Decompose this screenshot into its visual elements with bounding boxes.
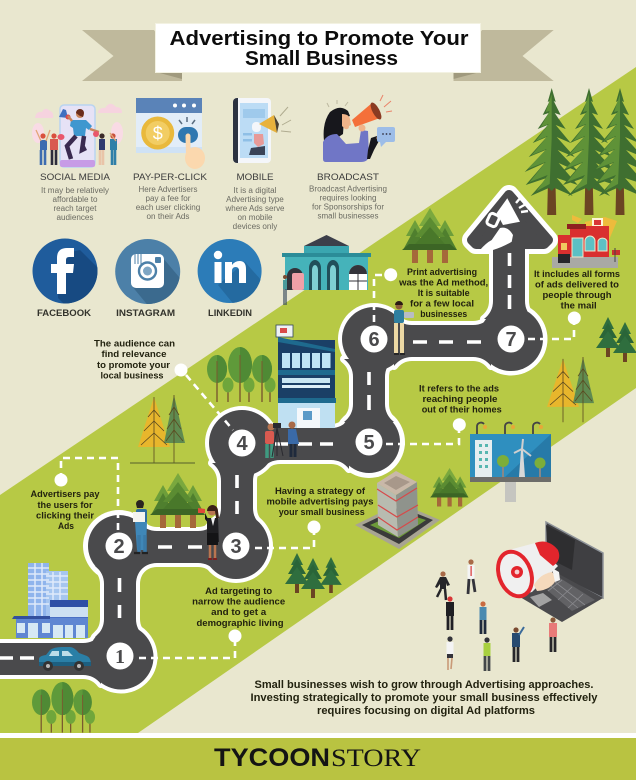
footer logo serif part: STORY <box>331 745 421 772</box>
label: linkedin: LINKEDIN <box>208 308 252 319</box>
icon: pay-per-click <box>136 98 205 169</box>
step number markers: 2 <box>113 536 125 558</box>
title ribbon <box>82 23 554 81</box>
person: woman with laptop <box>394 301 414 354</box>
blue tall shop building <box>276 325 336 428</box>
teal building <box>282 235 371 305</box>
section: mobile text: MOBILE <box>236 172 274 183</box>
step 6 text: was the Ad method, <box>398 277 488 288</box>
step number markers: 3 <box>230 536 242 558</box>
step 6 text: Print advertising <box>407 266 477 277</box>
step 7 text <box>534 268 620 311</box>
step 2 text: the users for <box>38 499 93 510</box>
section: mobile text: on mobile <box>238 213 273 222</box>
person: cameraman and presenter <box>265 422 299 458</box>
label: facebook: FACEBOOK <box>37 308 91 319</box>
section: mobile text: It is a digital <box>234 186 277 195</box>
isometric tower <box>355 471 440 549</box>
step 4 text: local business <box>100 370 164 381</box>
title text: Small Business <box>245 47 398 70</box>
section: social media text: audiences <box>56 213 94 222</box>
icon: linkedin <box>198 239 262 303</box>
step number markers: 4 <box>236 433 248 455</box>
section: pay-per-click text: Here Advertisers <box>138 185 198 194</box>
title text: Advertising to Promote Your <box>170 27 469 50</box>
section: social media text: SOCIAL MEDIA <box>40 172 111 183</box>
section: mobile text <box>225 172 285 231</box>
dashed connectors <box>61 275 574 658</box>
step 6 text: It is suitable <box>418 287 470 298</box>
section: social media text <box>40 172 111 222</box>
billboard <box>470 423 551 502</box>
icon: social media <box>32 104 123 167</box>
pine cluster near steps 2-3 <box>150 473 205 528</box>
step number markers: 5 <box>363 432 375 454</box>
section: broadcast text: Broadcast Advertising <box>309 184 387 194</box>
section: pay-per-click text: each user clicking <box>136 203 200 212</box>
step 5 text: out of their homes <box>422 404 502 415</box>
autumn trees right <box>547 357 594 422</box>
car <box>39 647 91 671</box>
section: broadcast text: BROADCAST <box>317 172 379 183</box>
section: mobile text: devices only <box>233 222 277 231</box>
step 5 text <box>419 383 502 415</box>
pine cluster near step 6 <box>402 208 457 263</box>
section: mobile text: Advertising type <box>226 195 284 204</box>
icon: facebook <box>32 238 98 304</box>
icon: pay-per-click: $ <box>153 124 163 144</box>
step 6 text: businesses <box>420 308 467 319</box>
step 7 text: of ads delivered to <box>535 279 619 290</box>
step number markers: 6 <box>368 329 380 351</box>
icon: broadcast <box>323 95 395 162</box>
road <box>0 195 548 694</box>
big pine trees <box>525 88 636 215</box>
small pines centre <box>285 553 342 598</box>
person: woman with megaphone <box>198 505 219 559</box>
round trees near step 4 <box>207 347 276 402</box>
step number markers: 7 <box>505 329 517 351</box>
section: social media text: reach target <box>54 204 97 213</box>
section: pay-per-click text <box>133 172 208 221</box>
step 5 text: It refers to the ads <box>419 383 499 394</box>
autumn trees left <box>130 395 195 463</box>
section: broadcast text: requires looking <box>320 194 376 202</box>
person: woman with tablet <box>133 500 148 553</box>
step number markers: 1 <box>115 646 125 668</box>
connector end dots <box>54 268 581 642</box>
section: social media text: It may be relatively <box>41 186 109 195</box>
section: pay-per-click text: on their Ads <box>146 212 190 221</box>
closing text block <box>250 679 598 717</box>
step 1 text: Ad targeting to <box>205 585 272 596</box>
step 1 text: narrow the audience <box>192 596 285 607</box>
step 4 text: find relevance <box>102 348 166 359</box>
closing text block: Investing strategically to promote your small business effectively <box>250 692 598 704</box>
blue office building <box>12 563 88 638</box>
step number markers <box>106 326 524 670</box>
section: broadcast text <box>309 172 387 220</box>
step 2 text: Advertisers pay <box>30 488 100 499</box>
step 3 text: your small business <box>279 506 365 517</box>
crowd of business people <box>435 559 557 671</box>
step 4 text: to promote your <box>97 359 170 370</box>
step 3 text <box>266 485 374 517</box>
closing text block: Small businesses wish to grow through Advertising approaches. <box>254 679 594 691</box>
footer bar <box>0 738 636 780</box>
step 6 text: for a few local <box>410 298 474 309</box>
step 3 text: Having a strategy of <box>275 485 366 496</box>
icon: instagram <box>115 239 180 304</box>
icon: mobile <box>233 98 291 163</box>
step 5 text: reaching people <box>422 393 498 404</box>
section: pay-per-click text: pay a fee for <box>146 194 191 203</box>
icon: megaphone on arrow <box>480 197 528 250</box>
step 7 text: It includes all forms <box>534 268 620 279</box>
step 4 text: The audience can <box>94 338 175 349</box>
section: broadcast text: small businesses <box>318 212 378 220</box>
white footer divider <box>0 733 636 738</box>
round trees bottom left <box>32 682 95 733</box>
section: broadcast text: for Sponsorships for <box>312 202 384 212</box>
road dashes <box>0 253 510 658</box>
closing text block: requires focusing on digital Ad platforms <box>317 705 535 717</box>
label: instagram: INSTAGRAM <box>116 308 175 319</box>
step 1 text <box>192 585 285 628</box>
section: social media text: affordable to <box>52 195 98 204</box>
red shop <box>552 215 620 268</box>
step 7 text: the mail <box>561 300 597 311</box>
footer logo: TYCOON <box>214 744 330 772</box>
step 3 text: mobile advertising pays <box>266 495 374 506</box>
laptop with megaphone <box>490 522 603 622</box>
small pines right <box>596 317 636 362</box>
step 2 text: Ads <box>58 520 74 531</box>
step 6 text <box>398 266 488 319</box>
step 7 text: people through <box>542 289 612 300</box>
section: pay-per-click text: PAY-PER-CLICK <box>133 172 208 183</box>
pine cluster near step 5 <box>430 468 468 506</box>
step 2 text <box>30 488 100 531</box>
step 4 text <box>94 338 175 381</box>
step 1 text: and to get a <box>211 606 267 617</box>
section: mobile text: where Ads serve <box>225 204 285 213</box>
step 1 text: demographic living <box>196 617 284 628</box>
step 2 text: clicking their <box>36 510 94 521</box>
